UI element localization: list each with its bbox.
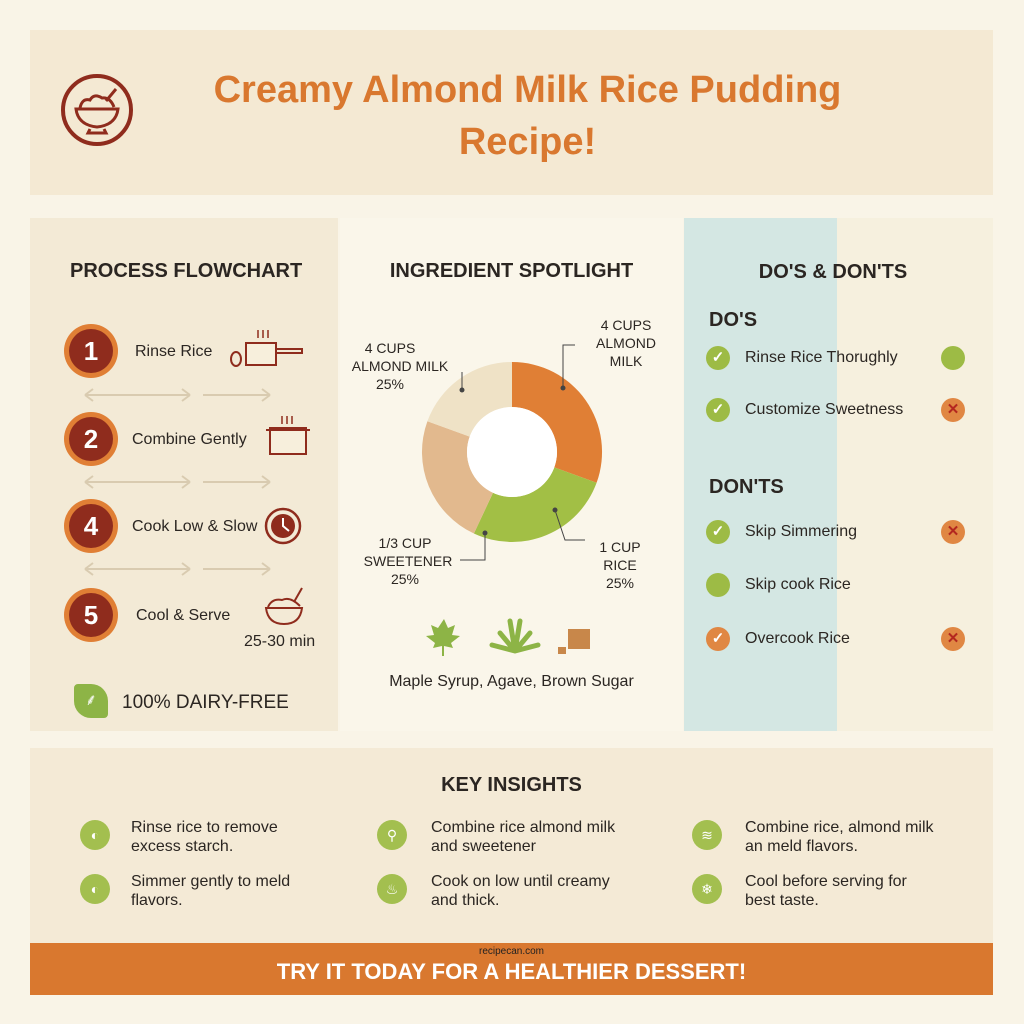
step 4 xyxy=(64,499,302,553)
insight 6 xyxy=(692,873,907,909)
heading: key insights: KEY INSIGHTS xyxy=(441,774,582,796)
panel: key insights xyxy=(30,748,993,943)
insight 2 xyxy=(377,819,616,855)
insight 4: flavors. xyxy=(131,892,183,909)
icon: saucepan xyxy=(230,330,303,367)
insight 5 xyxy=(377,873,610,909)
dont item 3: ✓ xyxy=(712,630,724,647)
donut chart: 25% xyxy=(376,376,404,392)
step 2 xyxy=(64,412,310,466)
step 1: 1 xyxy=(84,336,98,366)
title xyxy=(214,69,841,163)
step 4: Cook Low & Slow xyxy=(132,518,257,535)
do item 2: ✕ xyxy=(947,401,959,418)
donut chart: 1 CUP xyxy=(599,539,641,555)
donut chart: ALMOND MILK xyxy=(352,358,449,374)
arrows row xyxy=(84,388,270,402)
step 5: 25-30 min xyxy=(244,633,315,650)
insight 4: Simmer gently to meld xyxy=(131,873,290,890)
donut chart: RICE xyxy=(603,557,637,573)
insight 6: Cool before serving for xyxy=(745,873,907,890)
dont item 3: ✕ xyxy=(947,630,959,647)
dont item 3: Overcook Rice xyxy=(745,630,850,647)
icon: bowl xyxy=(264,588,304,625)
insight 3: ≋ xyxy=(701,827,713,843)
step 1 xyxy=(64,324,303,378)
insight 3: Combine rice, almond milk xyxy=(745,819,934,836)
donut chart: 4 CUPS xyxy=(365,340,415,356)
title: Creamy Almond Milk Rice Pudding xyxy=(214,69,841,111)
step 4: 4 xyxy=(84,511,98,541)
dont item 2 xyxy=(706,573,851,597)
dairy-free badge: ⸙ xyxy=(85,692,97,709)
insight 4: ◐ xyxy=(91,881,99,897)
icon: pot xyxy=(266,416,310,455)
step 2: 2 xyxy=(84,424,98,454)
insight 5: Cook on low until creamy xyxy=(431,873,610,890)
donut chart xyxy=(352,317,656,591)
do item 1: ✓ xyxy=(712,349,724,366)
sweetener caption: Maple Syrup, Agave, Brown Sugar xyxy=(389,673,634,690)
do item 2 xyxy=(706,398,965,422)
panel: ingredient spotlight xyxy=(340,218,683,731)
insight 1: Rinse rice to remove xyxy=(131,819,278,836)
step 5: 5 xyxy=(84,600,98,630)
insight 1 xyxy=(80,819,278,855)
do item 1 xyxy=(706,346,965,370)
icon: clock xyxy=(264,508,302,544)
do item 2: Customize Sweetness xyxy=(745,401,903,418)
insight 5: and thick. xyxy=(431,892,499,909)
insight 3 xyxy=(692,819,934,855)
subheading: do's: DO'S xyxy=(709,309,757,331)
heading: do's & don'ts: DO'S & DON'TS xyxy=(759,261,907,283)
insight 2: ⚲ xyxy=(387,827,397,843)
arrows row xyxy=(84,562,270,576)
title: Recipe! xyxy=(459,121,596,163)
insight 1: excess starch. xyxy=(131,838,233,855)
donut chart: SWEETENER xyxy=(364,553,452,569)
insight 6: ❄ xyxy=(701,881,713,897)
dont item 1: ✕ xyxy=(947,523,959,540)
dairy-free badge: 100% DAIRY-FREE xyxy=(122,692,289,713)
dont item 1 xyxy=(706,520,965,544)
donut chart: ALMOND xyxy=(596,335,656,351)
insight 2: Combine rice almond milk xyxy=(431,819,615,836)
donut chart: 1/3 CUP xyxy=(379,535,431,551)
subheading: don'ts: DON'TS xyxy=(709,476,784,498)
insight 1: ◐ xyxy=(91,827,99,843)
heading: process flowchart: PROCESS FLOWCHART xyxy=(70,260,302,282)
header band xyxy=(30,30,993,195)
insight 6: best taste. xyxy=(745,892,819,909)
step 5: Cool & Serve xyxy=(136,607,230,624)
dont item 2: Skip cook Rice xyxy=(745,576,851,593)
panel: do's and don'ts xyxy=(684,218,993,731)
donut chart: 25% xyxy=(391,571,419,587)
do item 1: Rinse Rice Thorughly xyxy=(745,349,898,366)
insight 2: and sweetener xyxy=(431,838,536,855)
step 1: Rinse Rice xyxy=(135,343,212,360)
donut chart: 4 CUPS xyxy=(601,317,651,333)
sweetener icons xyxy=(426,618,590,656)
insight 4 xyxy=(80,873,290,909)
donut chart: 25% xyxy=(606,575,634,591)
banner: call to action: TRY IT TODAY FOR A HEALTHIER DESSERT! xyxy=(277,959,746,984)
insight 3: an meld flavors. xyxy=(745,838,858,855)
dont item 3 xyxy=(706,627,965,651)
heading: ingredient spotlight: INGREDIENT SPOTLIGHT xyxy=(390,260,633,282)
step 2: Combine Gently xyxy=(132,431,247,448)
insight 5: ♨ xyxy=(386,881,398,897)
icon: pudding bowl xyxy=(61,74,133,146)
donut chart: MILK xyxy=(610,353,643,369)
do item 2: ✓ xyxy=(712,401,724,418)
banner: call to action xyxy=(30,943,993,995)
dont item 1: Skip Simmering xyxy=(745,523,857,540)
arrows row xyxy=(84,475,270,489)
dairy-free badge xyxy=(74,684,289,718)
panel: process flowchart xyxy=(30,218,338,731)
banner: call to action: recipecan.com xyxy=(479,946,544,957)
step 5 xyxy=(64,588,315,650)
dont item 1: ✓ xyxy=(712,523,724,540)
